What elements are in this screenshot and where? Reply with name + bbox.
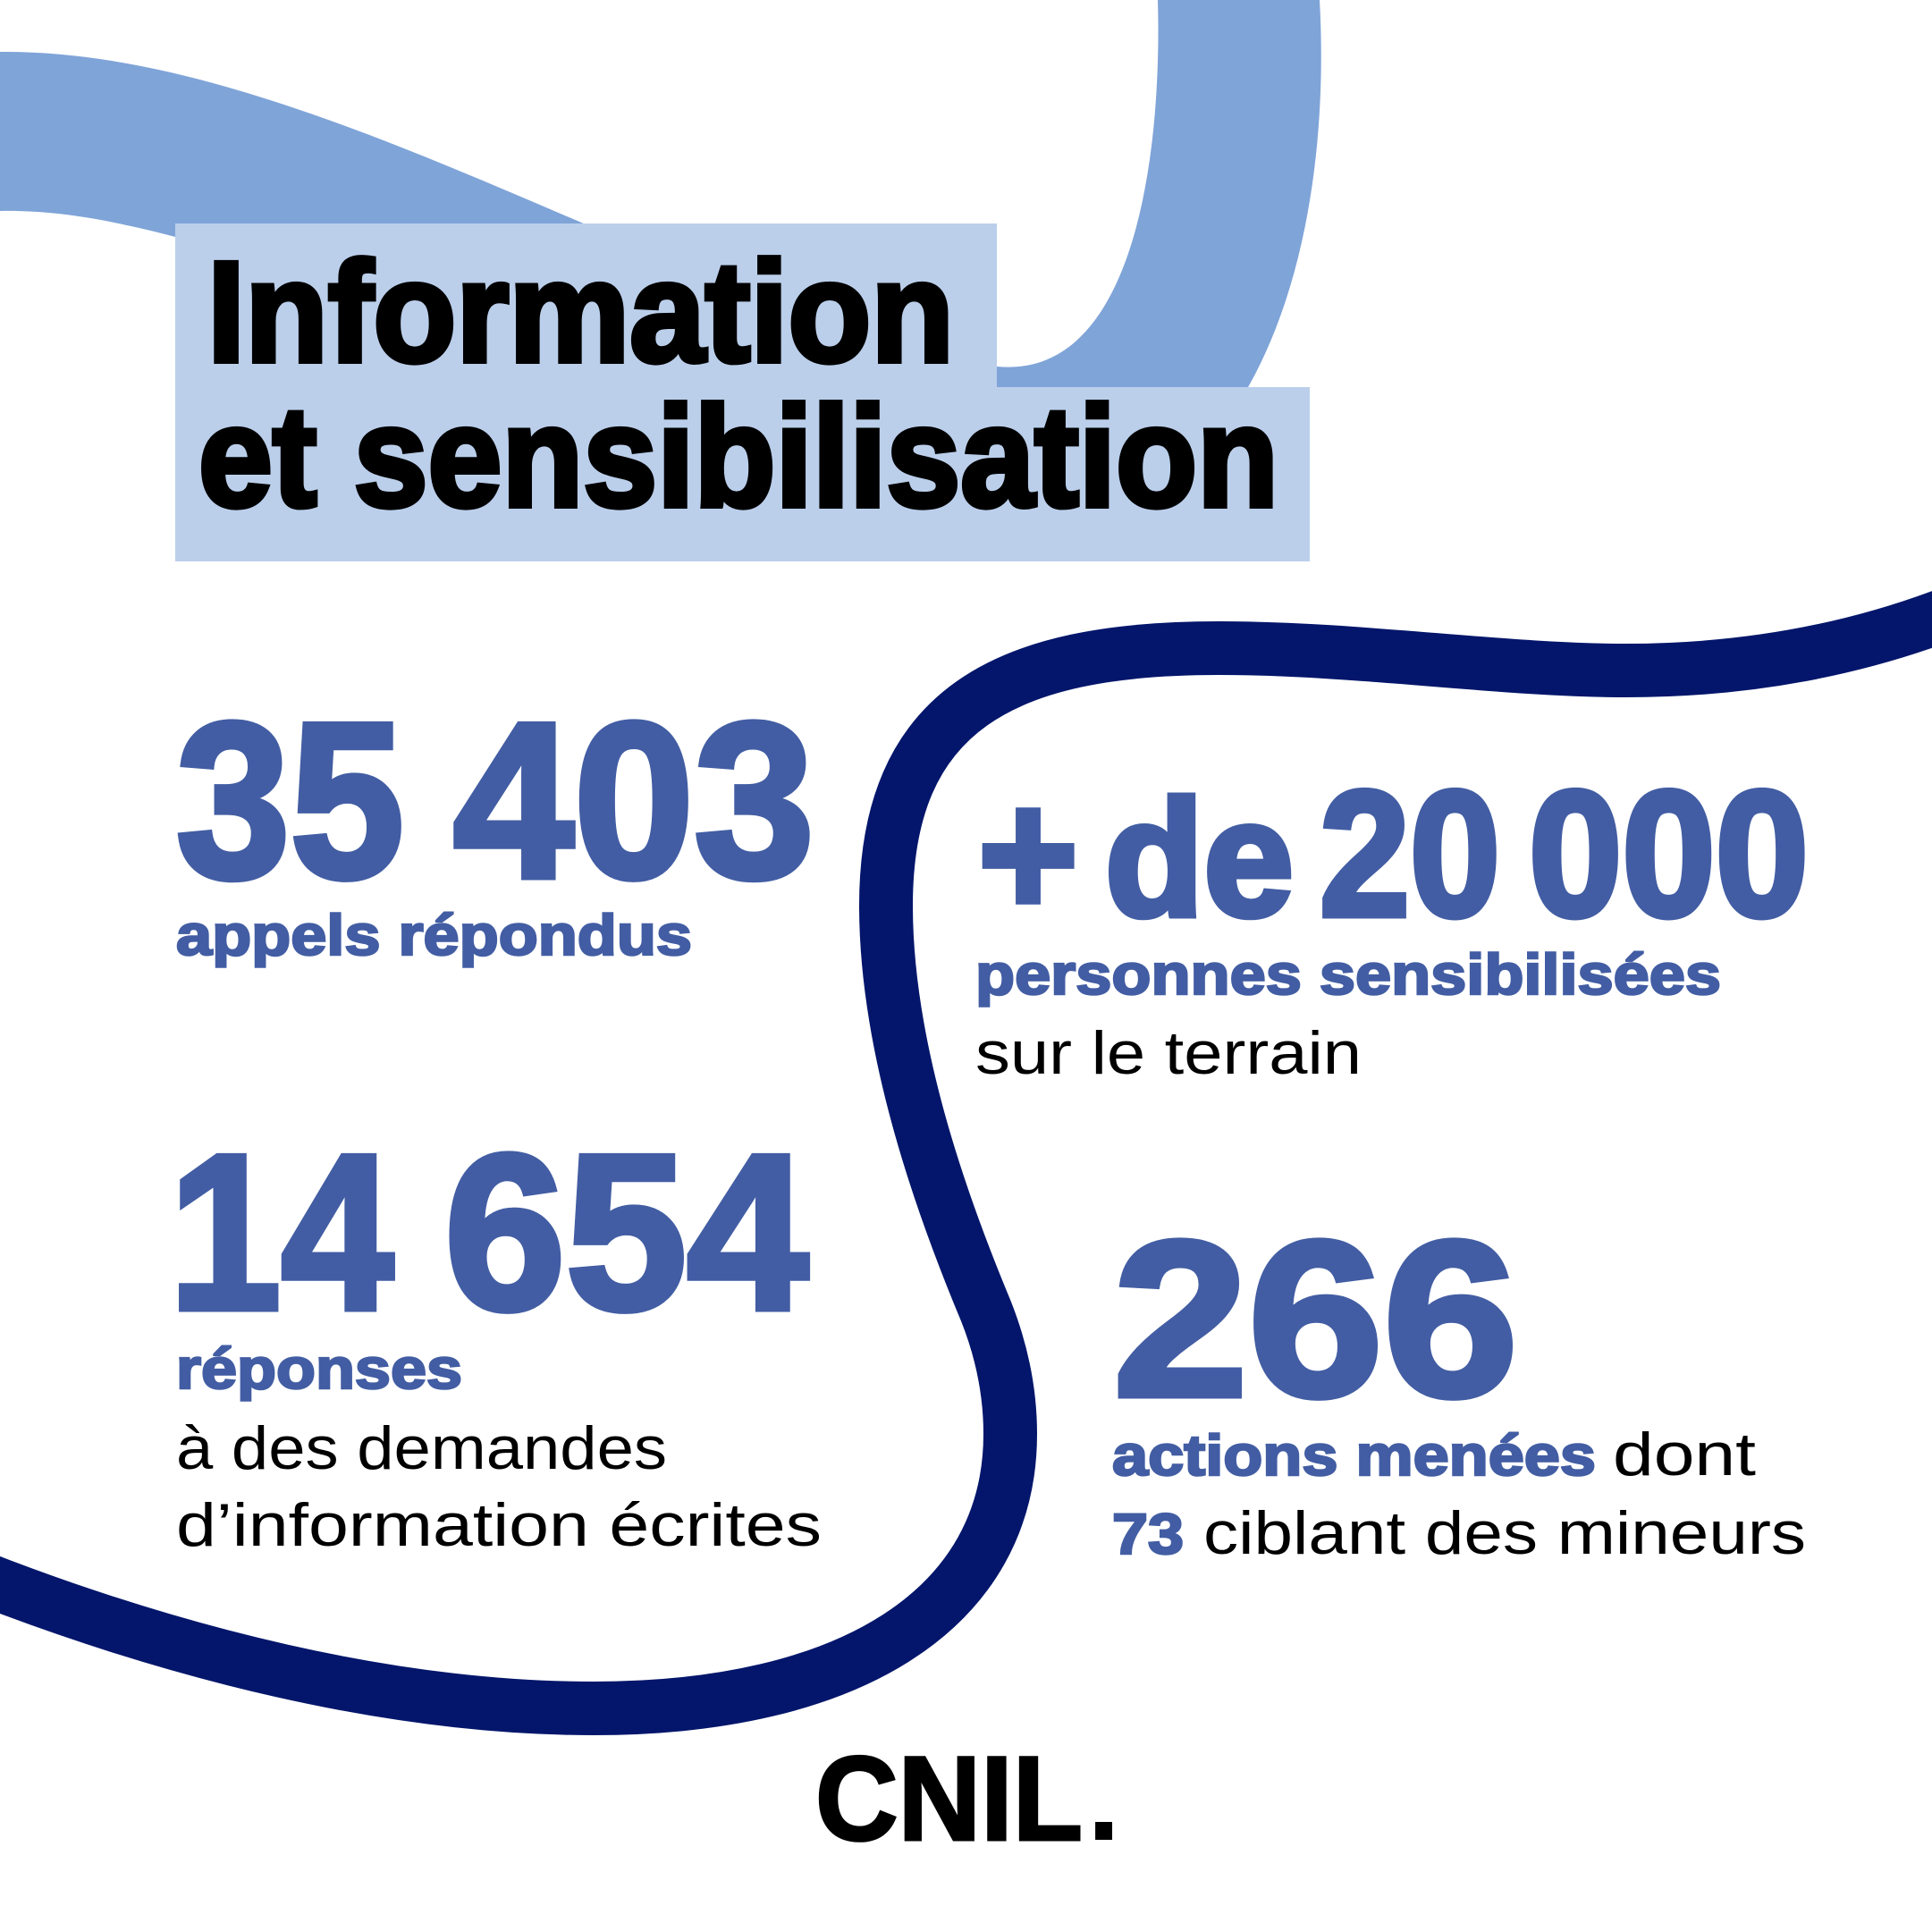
label actions menées: actions menées xyxy=(1112,1423,1596,1488)
decorative band: top left wave xyxy=(0,52,586,268)
navy wave divider xyxy=(0,604,1932,1708)
label appels répondus: appels répondus xyxy=(176,903,692,967)
title block xyxy=(175,223,1310,561)
number + de 20 000: 20 xyxy=(1320,755,1500,954)
stat: actions xyxy=(1112,1194,1806,1567)
number + de 20 000: de xyxy=(1105,767,1294,951)
number 14 654 xyxy=(169,1108,808,1356)
number + de 20 000 xyxy=(978,755,1809,954)
label personnes sensibilisées: personnes sensibilisées xyxy=(975,942,1721,1007)
number 35 403: 35 xyxy=(176,676,404,924)
number 14 654: 14 xyxy=(169,1108,393,1356)
logo CNIL: . xyxy=(1087,1733,1120,1866)
number 35 403 xyxy=(176,676,814,924)
label ciblant des mineurs: ciblant des mineurs xyxy=(1203,1499,1806,1567)
label sur le terrain: sur le terrain xyxy=(975,1019,1362,1087)
label réponses: réponses xyxy=(176,1337,462,1401)
number 14 654: 654 xyxy=(444,1108,808,1356)
stat: calls answered xyxy=(176,676,814,967)
number 35 403: 403 xyxy=(453,676,814,924)
logo CNIL: CNIL xyxy=(815,1733,1083,1866)
label à des demandes: à des demandes xyxy=(176,1414,667,1482)
number 73: 73 xyxy=(1112,1502,1184,1566)
label d'information écrites: d’information écrites xyxy=(176,1491,822,1559)
number + de 20 000: + xyxy=(978,755,1078,954)
title line 2: et sensibilisation xyxy=(198,376,1278,536)
number + de 20 000: 000 xyxy=(1529,755,1809,954)
number 266: 266 xyxy=(1113,1194,1518,1443)
label dont: dont xyxy=(1613,1421,1756,1488)
title background xyxy=(175,223,1310,561)
stat: people reached xyxy=(975,755,1809,1087)
title line 1: Information xyxy=(207,232,954,392)
stat: written replies xyxy=(169,1108,822,1559)
decorative band: top right curve xyxy=(983,0,1321,393)
